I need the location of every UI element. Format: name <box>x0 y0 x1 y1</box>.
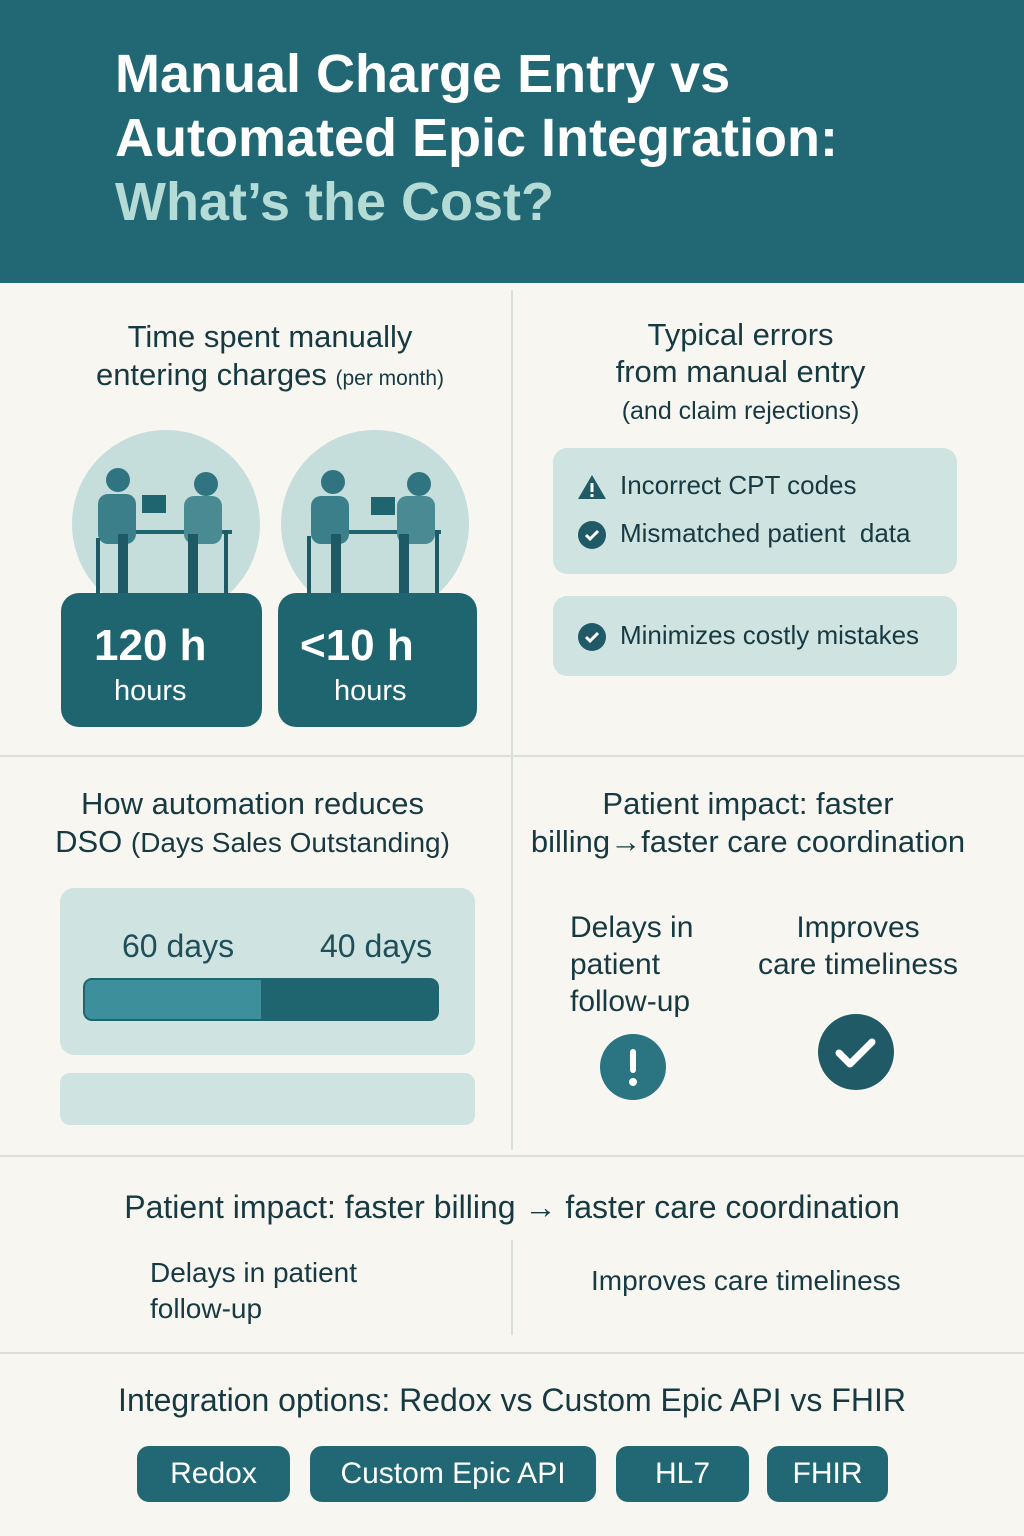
pill: Custom Epic API: Custom Epic API <box>340 1457 566 1490</box>
icon: exclamation <box>600 1034 666 1100</box>
text: improves <box>758 911 958 981</box>
text: delays <box>570 911 693 1018</box>
icon: warning <box>578 475 606 499</box>
text: delays: follow-up <box>570 985 690 1018</box>
stat: 120 h: 120 h <box>94 621 207 670</box>
icon: check circle <box>818 1014 894 1090</box>
stat: <10 h <box>278 593 477 727</box>
heading: patient impact: billing→faster care coordination <box>531 824 965 859</box>
text: delays: patient <box>570 948 660 981</box>
title: Automated Epic Integration: <box>115 108 838 168</box>
empty bar <box>60 1073 475 1125</box>
pill: FHIR <box>767 1446 888 1502</box>
text: improves: care timeliness <box>758 948 958 981</box>
heading: Integration options: Redox vs Custom Epic API vs FHIR <box>118 1382 906 1418</box>
heading: DSO: How automation reduces <box>81 786 424 821</box>
panel: DSO <box>55 786 475 1125</box>
DSO bar chart <box>60 888 475 1055</box>
panel: time spent <box>61 319 477 727</box>
heading: time spent <box>96 319 444 392</box>
icon: check <box>578 623 606 651</box>
text: delays <box>150 1257 357 1324</box>
heading: errors: (and claim rejections) <box>622 397 859 425</box>
benefit box <box>553 596 957 676</box>
pill: Custom Epic API <box>310 1446 596 1502</box>
benefit box: Minimizes costly mistakes <box>620 620 919 650</box>
heading: patient impact: Patient impact: faster <box>602 786 894 821</box>
text: improves: Improves care timeliness <box>591 1265 901 1296</box>
text: improves: Improves <box>796 911 920 944</box>
stat: <10 h: hours <box>334 675 407 707</box>
title <box>115 44 838 232</box>
heading: Patient impact: faster billing → faster care coordination <box>124 1189 900 1225</box>
heading: DSO: DSO (Days Sales Outstanding) <box>55 824 450 859</box>
pill: Redox <box>137 1446 290 1502</box>
title: What’s the Cost? <box>115 172 554 232</box>
stat: 120 h <box>61 593 262 727</box>
pill: HL7: HL7 <box>655 1457 710 1490</box>
pill: FHIR: FHIR <box>792 1457 862 1490</box>
error list box: Incorrect CPT codes <box>620 470 857 500</box>
stat: 120 h: hours <box>114 675 187 707</box>
panel: typical errors <box>553 317 957 676</box>
text: delays: follow-up <box>150 1293 262 1324</box>
header banner <box>0 0 1024 283</box>
title: Manual Charge Entry vs <box>115 44 730 104</box>
DSO bar chart: 60 days <box>122 928 234 964</box>
heading: patient impact <box>531 786 965 859</box>
icon: people at desk 2 <box>281 430 469 593</box>
heading: errors: Typical errors <box>647 317 834 352</box>
DSO bar chart: 40 days <box>320 928 432 964</box>
heading: DSO <box>55 786 450 859</box>
icon: people at desk 1 <box>72 430 260 593</box>
heading: time spent: entering charges (per month) <box>96 357 444 392</box>
text: delays: Delays in patient <box>150 1257 357 1288</box>
section: patient impact wide <box>124 1189 901 1324</box>
text: delays: Delays in <box>570 911 693 944</box>
error list box: Mismatched patient data <box>620 518 910 548</box>
panel: patient impact <box>531 786 965 1100</box>
pill: Redox: Redox <box>170 1457 257 1490</box>
heading: errors <box>616 317 866 425</box>
pill: HL7 <box>616 1446 749 1502</box>
stat: <10 h: <10 h <box>300 621 414 670</box>
icon: check <box>578 521 606 549</box>
heading: time spent: Time spent manually <box>128 319 412 354</box>
error list box <box>553 448 957 574</box>
heading: errors: from manual entry <box>616 354 865 389</box>
